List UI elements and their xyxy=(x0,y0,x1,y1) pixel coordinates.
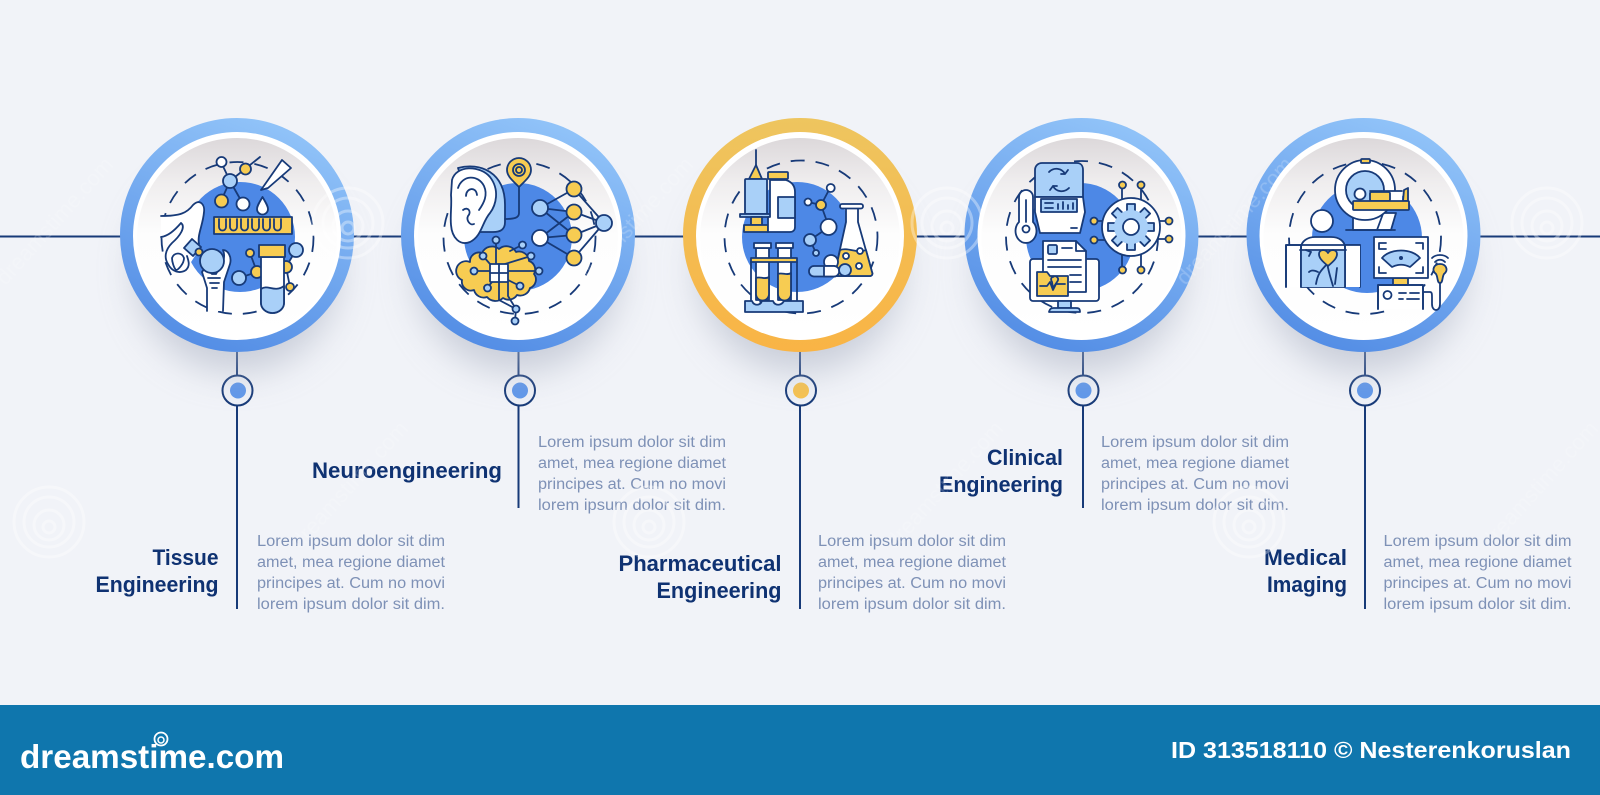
connector with node xyxy=(222,340,252,609)
text block xyxy=(818,533,1007,613)
text block: amet, mea regione diamet xyxy=(818,554,1007,571)
icon: pharmaceutical xyxy=(724,150,878,314)
heading: Medical Imaging xyxy=(1264,545,1347,597)
icon: neuroengineering xyxy=(444,158,612,324)
watermark overlay: dreamstime.com xyxy=(286,416,413,554)
connector with node xyxy=(505,340,535,508)
text block: principes at. Cum no movi xyxy=(1101,476,1289,493)
text block: lorem ipsum dolor sit dim. xyxy=(1101,497,1289,514)
connector with node xyxy=(1350,340,1380,609)
heading: Clinical Engineering: Engineering xyxy=(939,472,1063,497)
icon: clinical xyxy=(1006,161,1172,313)
panel: clinical engineering xyxy=(939,118,1290,514)
watermark overlay xyxy=(0,152,1600,557)
heading: Pharmaceutical Engineering: Pharmaceutical xyxy=(618,551,782,576)
text block: principes at. Cum no movi xyxy=(538,476,726,493)
text block xyxy=(538,434,727,514)
ring badge xyxy=(683,118,917,372)
watermark overlay: dreamstime.com xyxy=(881,416,1008,554)
panel: medical imaging xyxy=(1246,118,1572,613)
text block: lorem ipsum dolor sit dim. xyxy=(818,596,1006,613)
text block: lorem ipsum dolor sit dim. xyxy=(257,596,445,613)
heading: Tissue Engineering: Tissue xyxy=(152,545,218,570)
logo: dreamstime.com xyxy=(20,738,284,775)
text block: amet, mea regione diamet xyxy=(257,554,446,571)
icon: tissue engineering xyxy=(161,157,314,314)
heading: Tissue Engineering xyxy=(96,545,218,597)
text block: amet, mea regione diamet xyxy=(538,455,727,472)
text block xyxy=(1384,533,1572,613)
ring badge xyxy=(1246,118,1480,372)
text block: amet, mea regione diamet xyxy=(1101,455,1290,472)
heading: Clinical Engineering xyxy=(939,445,1063,497)
text block xyxy=(257,533,446,613)
text block: principes at. Cum no movi xyxy=(1384,575,1572,592)
panel: neuroengineering xyxy=(312,118,727,514)
connector with node xyxy=(1068,340,1098,508)
text block: Lorem ipsum dolor sit dim xyxy=(818,533,1006,550)
heading: Medical Imaging: Medical xyxy=(1264,545,1347,570)
text block: amet, mea regione diamet xyxy=(1384,554,1572,571)
text block: Lorem ipsum dolor sit dim xyxy=(1101,434,1289,451)
text block: principes at. Cum no movi xyxy=(257,575,445,592)
footer banner xyxy=(0,705,1600,795)
text block: lorem ipsum dolor sit dim. xyxy=(1384,596,1572,613)
icon: medical imaging xyxy=(1286,159,1448,314)
text block: Lorem ipsum dolor sit dim xyxy=(538,434,726,451)
text block: Lorem ipsum dolor sit dim xyxy=(1384,533,1572,550)
watermark overlay: dreamstime.com xyxy=(571,152,698,290)
timeline horizontal line xyxy=(0,236,1600,238)
ring badge xyxy=(120,118,354,372)
connector with node xyxy=(786,340,816,609)
ring badge xyxy=(401,118,635,372)
image id credit: ID 313518110 © Nesterenkoruslan xyxy=(1171,737,1571,763)
heading: Pharmaceutical Engineering: Engineering xyxy=(656,578,782,603)
panel: pharmaceutical engineering xyxy=(618,118,1007,613)
heading: Pharmaceutical Engineering xyxy=(618,551,782,603)
text block: lorem ipsum dolor sit dim. xyxy=(538,497,726,514)
heading: Neuroengineering: Neuroengineering xyxy=(312,458,502,483)
heading: Medical Imaging: Imaging xyxy=(1267,572,1347,597)
panel: tissue engineering xyxy=(96,118,446,613)
ring badge xyxy=(964,118,1198,372)
text block xyxy=(1101,434,1290,514)
text block: principes at. Cum no movi xyxy=(818,575,1006,592)
watermark overlay: dreamstime.com xyxy=(1171,152,1298,290)
heading: Tissue Engineering: Engineering xyxy=(96,572,218,597)
text block: Lorem ipsum dolor sit dim xyxy=(257,533,445,550)
watermark overlay: dreamstime.com xyxy=(1476,416,1600,554)
heading: Clinical Engineering: Clinical xyxy=(987,445,1063,470)
